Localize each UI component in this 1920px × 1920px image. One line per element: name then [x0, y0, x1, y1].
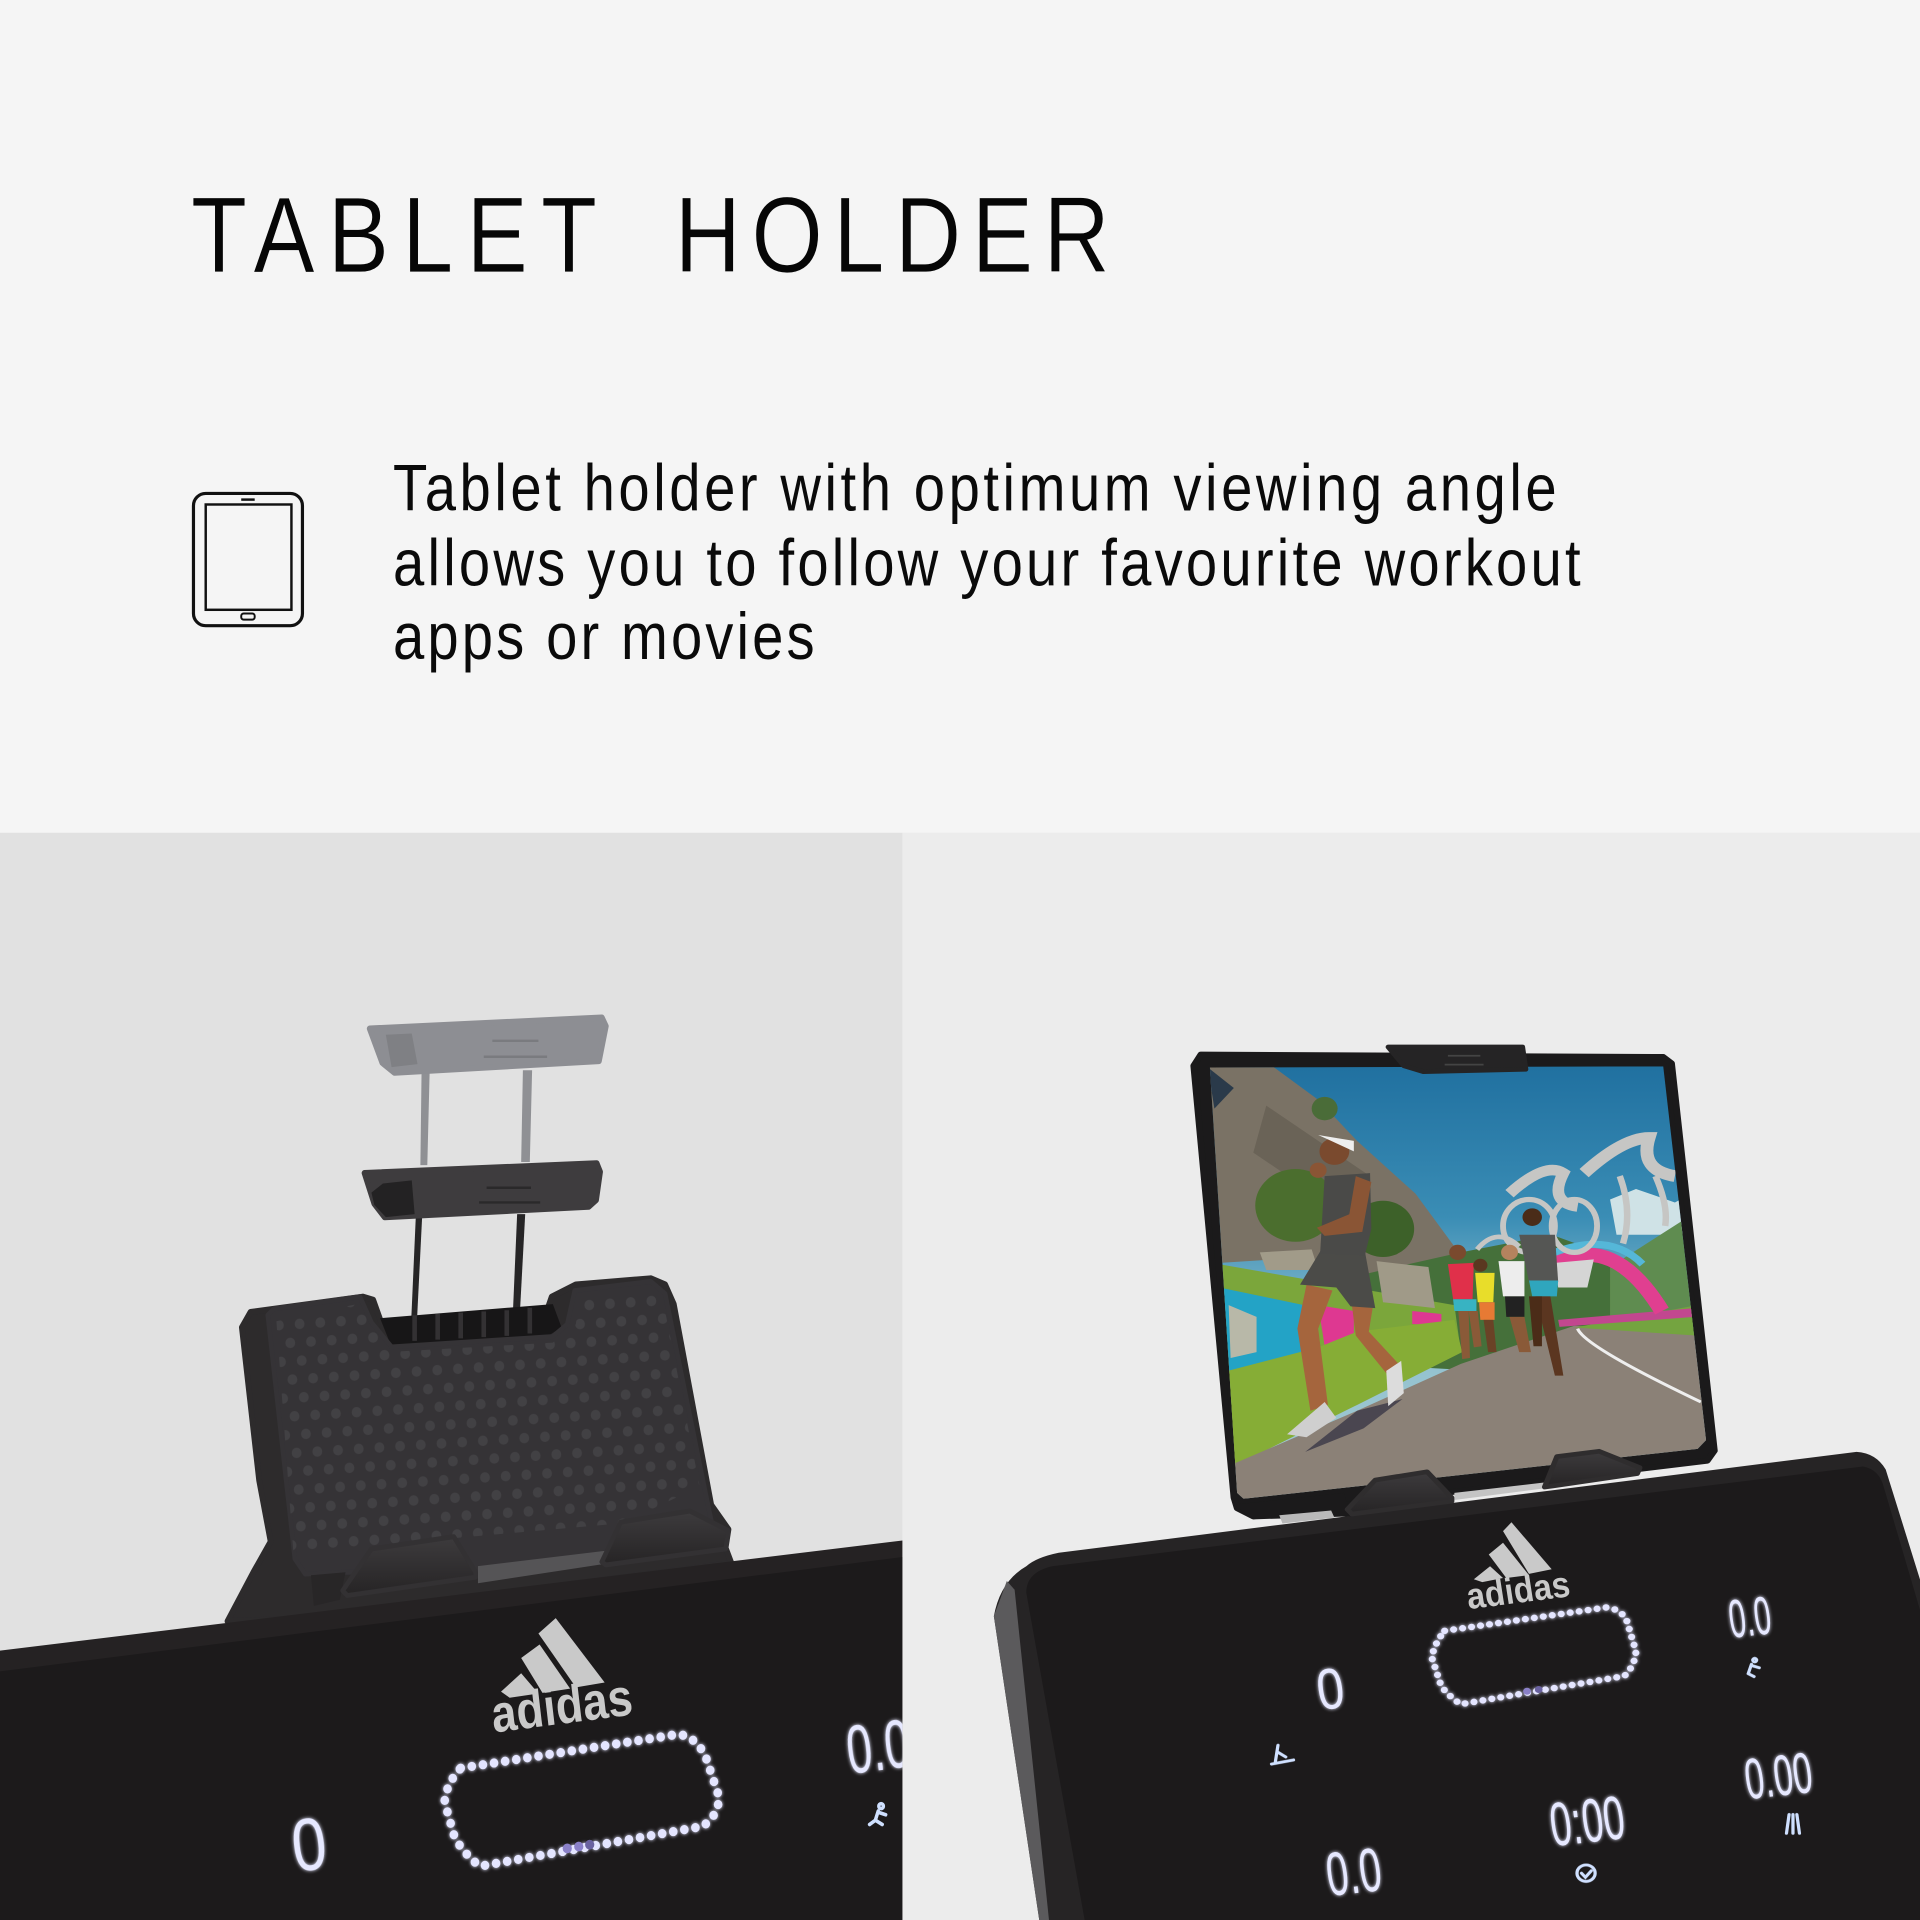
- LED readouts: [1312, 1585, 1816, 1909]
- LED digit: speed: 0.0: [842, 1706, 914, 1790]
- LED readouts: 0.0: [1322, 1834, 1386, 1909]
- description text: [393, 451, 1581, 674]
- background runners: [1448, 1208, 1563, 1376]
- panel: holder with tablet: [902, 833, 1920, 1920]
- icon: tablet: [193, 493, 302, 626]
- icon: runner: [870, 1804, 886, 1824]
- LED ring: [445, 1734, 719, 1866]
- raised clip (ghost position): [370, 1018, 606, 1165]
- description text: Tablet holder with optimum viewing angle: [393, 451, 1557, 526]
- adidas logo: [1464, 1522, 1573, 1618]
- holder base pad: [227, 1278, 731, 1621]
- tablet body: [1194, 1055, 1714, 1516]
- background: header panel: [0, 0, 1920, 833]
- treadmill console: [994, 1452, 1920, 1920]
- tablet screen scene: [1201, 1059, 1720, 1511]
- title: HOLDER: [675, 175, 1110, 296]
- lowered clip with straps: [365, 1163, 600, 1321]
- title: [191, 175, 1110, 296]
- LED digit: incline: 0: [287, 1801, 331, 1889]
- LED readouts: 0: [1312, 1655, 1348, 1722]
- adidas logo: [494, 1618, 632, 1732]
- icons: console symbols: [1271, 1658, 1799, 1881]
- LED ring: [1432, 1607, 1636, 1704]
- LED readouts: 0.0: [1725, 1585, 1775, 1650]
- description text: allows you to follow your favourite workout: [393, 526, 1581, 600]
- treadmill console: [0, 1540, 903, 1920]
- adidas logo: adidas: [1464, 1564, 1573, 1618]
- title: TABLET: [191, 175, 597, 296]
- holder feet: [311, 1519, 722, 1584]
- sculptures: [1477, 1138, 1675, 1252]
- tablet top clip: [1388, 1047, 1526, 1072]
- tablet bottom clips: [1234, 1451, 1640, 1523]
- LED readouts: 0.00: [1741, 1740, 1816, 1811]
- description text: apps or movies: [393, 600, 815, 674]
- LED readouts: 0:00: [1545, 1782, 1629, 1859]
- arch: [1555, 1255, 1662, 1311]
- main runner: [1287, 1135, 1404, 1437]
- panel: holder without tablet: [0, 833, 914, 1920]
- adidas logo: adidas: [488, 1667, 635, 1744]
